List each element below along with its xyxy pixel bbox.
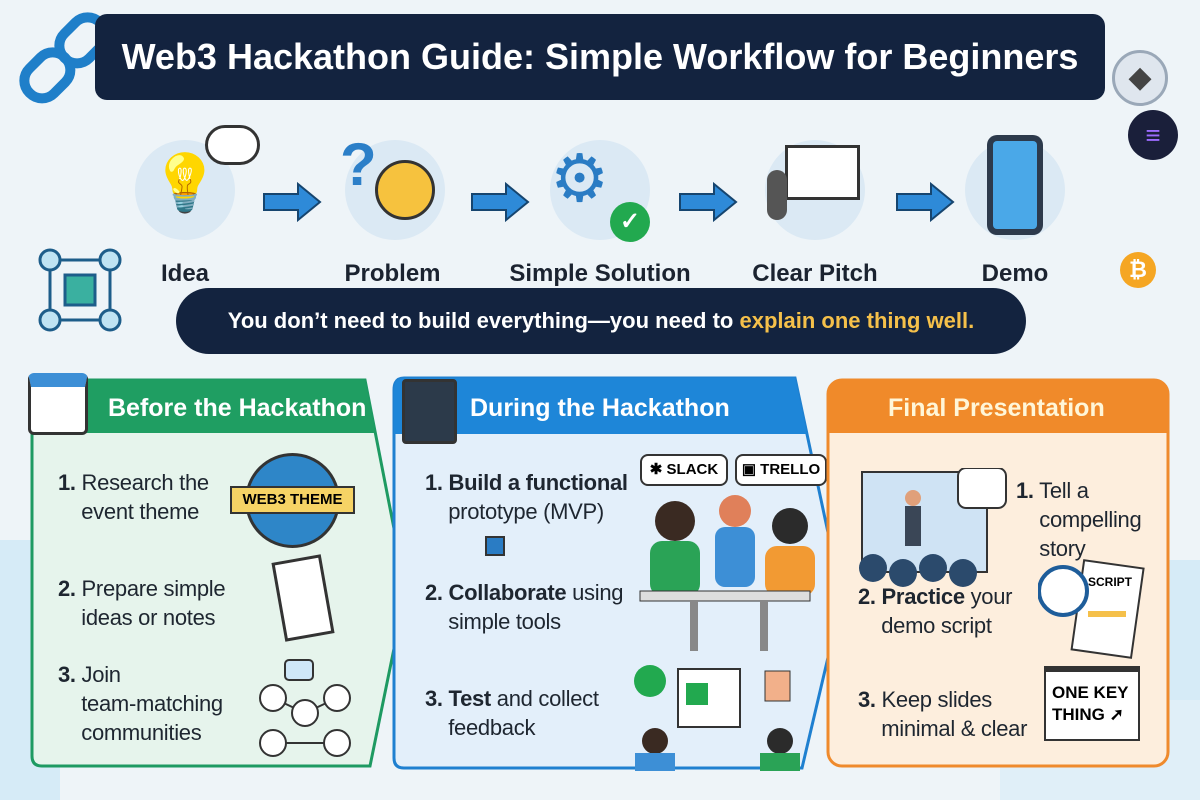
step: problem <box>340 131 445 287</box>
icon: ethereum: ◆ <box>1128 61 1152 94</box>
icon: one key thing slide: THING ➚ <box>1052 705 1124 724</box>
item 1: event theme <box>81 499 199 524</box>
arrow 1 <box>263 182 322 222</box>
step: idea: Idea <box>161 260 209 287</box>
item 1 <box>425 470 628 524</box>
step: simple solution: ✓ <box>620 208 640 235</box>
panel: before the hackathon <box>28 373 392 768</box>
item 2 <box>858 584 1012 638</box>
item 3: 3. Keep slides <box>858 687 992 712</box>
item 1: 1. Research the <box>58 470 209 495</box>
icon: community network <box>259 659 351 757</box>
item 1 <box>58 470 209 524</box>
item 2: 2. Prepare simple <box>58 576 225 601</box>
heading: Before the Hackathon <box>108 394 366 422</box>
item 3: feedback <box>448 715 535 740</box>
item 1 <box>1016 478 1141 561</box>
step: problem: Problem <box>344 260 441 287</box>
icon: solana: ≡ <box>1145 120 1161 150</box>
item 2: 2. Collaborate using <box>425 580 623 605</box>
icon: solana <box>1128 110 1178 160</box>
icon: notepad <box>271 554 335 642</box>
item 3: 3. Join <box>58 662 121 687</box>
callout: trello: ▣ TRELLO <box>742 461 820 478</box>
arrow 4 <box>896 182 954 222</box>
icon: clock and script: SCRIPT <box>1088 575 1133 589</box>
icon: code window <box>402 379 457 444</box>
item 1: 1. Tell a <box>1016 478 1089 503</box>
item 1: 1. Build a functional <box>425 470 628 495</box>
illustration: feedback <box>634 665 800 771</box>
step: demo: Demo <box>982 260 1048 287</box>
icon: calendar <box>28 373 88 435</box>
icon: globe theme <box>245 453 340 548</box>
step: clear pitch <box>752 140 878 287</box>
item 2: 2. Practice your <box>858 584 1012 609</box>
heading: Final Presentation <box>888 394 1105 422</box>
panel: before the hackathon: WEB3 THEME <box>242 491 342 508</box>
title banner: Web3 Hackathon Guide: Simple Workflow for Beginners <box>122 36 1078 77</box>
icon: one key thing slide: ONE KEY <box>1052 683 1129 702</box>
arrow 3 <box>679 182 738 222</box>
tagline pill <box>176 288 1026 354</box>
item 2 <box>58 576 225 630</box>
tagline pill: You don’t need to build everything—you need to explain one thing well. <box>228 308 974 333</box>
callout: trello <box>735 454 827 486</box>
step: idea <box>135 125 260 287</box>
step: simple solution: ⚙ <box>550 141 609 215</box>
icon: blocks <box>485 536 505 556</box>
panel: during the hackathon <box>392 376 826 771</box>
item 2: ideas or notes <box>81 605 215 630</box>
icon: bitcoin <box>1120 252 1156 288</box>
item 3 <box>58 662 223 745</box>
step: simple solution: Simple Solution <box>509 260 691 287</box>
title banner <box>95 14 1105 100</box>
item 3 <box>858 687 1028 741</box>
item 1: prototype (MVP) <box>448 499 604 524</box>
item 2: demo script <box>881 613 992 638</box>
step: demo <box>965 135 1065 287</box>
panel: final presentation <box>826 378 1170 768</box>
illustration: team at table <box>640 495 815 651</box>
icon: ethereum <box>1112 50 1168 106</box>
workflow row <box>135 125 1065 287</box>
illustration: speaker on stage <box>859 468 1007 587</box>
item 1: compelling <box>1039 507 1141 532</box>
item 3: 3. Test and collect <box>425 686 599 711</box>
item 2: simple tools <box>448 609 561 634</box>
step: idea: 💡 <box>150 151 220 214</box>
icon: bitcoin: ₿ <box>1129 257 1147 282</box>
step: problem: ? <box>340 131 377 198</box>
arrow 2 <box>471 182 530 222</box>
item 3: team-matching <box>81 691 223 716</box>
icon: one key thing slide <box>1044 666 1140 741</box>
step: simple solution <box>509 140 691 287</box>
icon: chain link <box>19 12 100 104</box>
item 3: minimal & clear <box>881 716 1027 741</box>
item 1: story <box>1039 536 1085 561</box>
item 2 <box>425 580 623 634</box>
callout: slack <box>640 454 728 486</box>
callout: slack: ✱ SLACK <box>650 461 718 478</box>
heading: During the Hackathon <box>470 394 730 422</box>
item 3: communities <box>81 720 201 745</box>
step: clear pitch: Clear Pitch <box>752 260 878 287</box>
item 3 <box>425 686 599 740</box>
icon: blockchain network left <box>38 248 122 332</box>
icon: clock and script <box>1038 559 1145 659</box>
